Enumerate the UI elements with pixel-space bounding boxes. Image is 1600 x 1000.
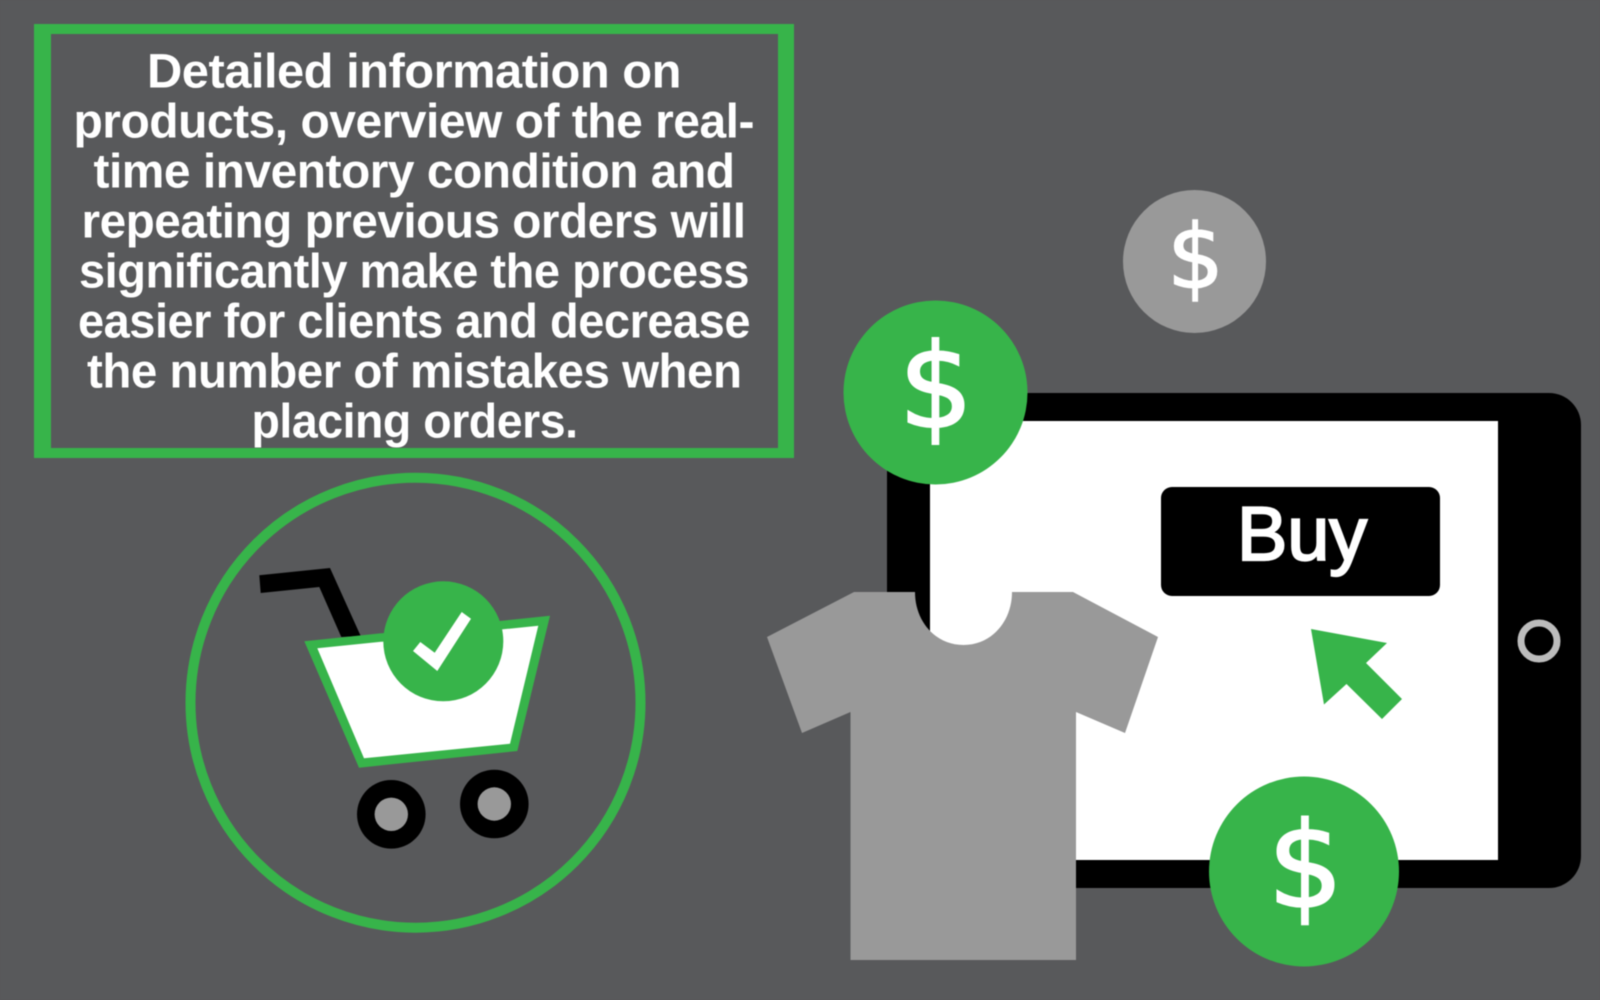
text block: description: significantly make the process (79, 244, 749, 298)
icon: gray dollar coin: $ (1167, 205, 1224, 309)
text block: description (74, 44, 754, 448)
text block: description: time inventory condition and (94, 144, 734, 198)
icon: green dollar coin bottom: $ (1268, 798, 1343, 936)
home button (1521, 623, 1557, 659)
cart wheel right (460, 770, 529, 838)
text block: description: products, overview of the real- (74, 94, 754, 148)
icon: tablet (887, 393, 1581, 888)
buy button: Buy (1237, 492, 1367, 577)
panel: description text box (34, 24, 794, 458)
icon: green dollar coin top: $ (899, 318, 973, 455)
check badge (383, 581, 503, 701)
icon: t-shirt (767, 592, 1158, 960)
icon: cursor arrow (1311, 629, 1402, 719)
cart handle (259, 568, 361, 637)
icon: green dollar coin top (844, 300, 1028, 484)
text block: description: placing orders. (252, 394, 578, 448)
text block: description: easier for clients and decrease (78, 294, 750, 348)
buy button (1161, 487, 1440, 596)
cart basket (304, 616, 550, 768)
text block: description: the number of mistakes when (87, 344, 742, 398)
cart wheel left (357, 780, 426, 849)
icon: shopping cart in circle (190, 478, 640, 928)
text block: description: Detailed information on (147, 44, 681, 98)
icon: green dollar coin bottom (1209, 776, 1399, 966)
text block: description: repeating previous orders will (82, 194, 746, 248)
icon: gray dollar coin (1123, 190, 1266, 333)
